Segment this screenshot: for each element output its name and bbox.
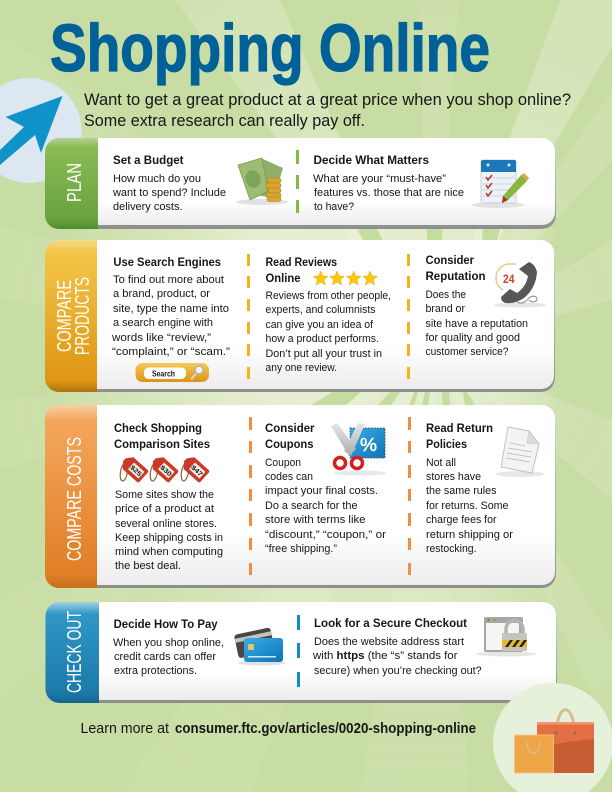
icon: search button xyxy=(136,363,209,382)
icon: phone with 24 clock: 24 xyxy=(503,274,515,286)
title: Shopping Online xyxy=(50,11,490,86)
text: consider reputation: Does the xyxy=(426,289,466,301)
text: consider reputation: Reputation xyxy=(426,269,486,283)
icon: shopping bags in circle xyxy=(493,683,612,792)
text: check shopping comparison sites: Keep shipping costs in xyxy=(115,532,223,544)
plan tab xyxy=(45,138,98,229)
text: consider coupons: Consider xyxy=(265,421,315,435)
text: read reviews online: Online xyxy=(266,271,301,285)
compare costs tab xyxy=(45,405,97,588)
check out tab xyxy=(46,602,99,703)
icon: credit cards xyxy=(234,627,286,666)
text: decide what matters xyxy=(313,153,464,213)
text: decide how to pay: When you shop online, xyxy=(113,637,224,649)
text: consider reputation: Consider xyxy=(426,253,474,267)
text: look for a secure checkout: secure) when you’re checking out? xyxy=(314,665,482,677)
icon: browser and padlock xyxy=(476,617,536,656)
learn more link text: consumer.ftc.gov/articles/0020-shopping-online xyxy=(175,721,476,737)
plan label: PLAN xyxy=(64,163,86,202)
text: use search engines: words like “review,” xyxy=(111,332,211,344)
text: use search engines: “complaint,” or “scam.” xyxy=(112,346,230,358)
text: check shopping comparison sites: Check Shopping xyxy=(114,421,202,435)
text: read return policies: charge fees for xyxy=(426,514,497,526)
icon: money and coins xyxy=(236,158,288,205)
divider xyxy=(297,615,300,687)
text: use search engines: a search engine with xyxy=(113,317,213,329)
text: consider reputation xyxy=(426,253,528,358)
text: set a budget: How much do you xyxy=(113,173,201,185)
text: consider coupons: impact your final costs. xyxy=(265,485,378,497)
text: look for a secure checkout: Does the website address start xyxy=(314,636,465,648)
text: read return policies: Policies xyxy=(426,437,467,451)
divider xyxy=(249,417,252,575)
text: check shopping comparison sites xyxy=(114,421,223,572)
text: check shopping comparison sites: the best deal. xyxy=(115,560,181,572)
text: consider coupons: “discount,” “coupon,” or xyxy=(265,529,386,541)
text: check shopping comparison sites: mind when computing xyxy=(115,546,223,558)
panel: plan xyxy=(45,138,556,229)
text: read reviews online: Don’t put all your trust in xyxy=(266,348,382,360)
text: check shopping comparison sites: several online stores. xyxy=(115,518,217,530)
text: set a budget xyxy=(112,153,226,213)
text: read return policies: Read Return xyxy=(426,421,493,435)
text: consider coupons: store with terms like xyxy=(265,514,366,526)
text: read reviews online: experts, and columnists xyxy=(266,304,376,316)
text: read return policies xyxy=(426,421,513,555)
intro text xyxy=(84,90,571,130)
text: use search engines: a brand, product, or xyxy=(113,288,210,300)
text: check shopping comparison sites: Some sites show the xyxy=(115,489,214,501)
text: consider reputation: brand or xyxy=(426,303,465,315)
text: consider coupons: codes can xyxy=(265,471,313,483)
icon: scissors and coupon: % xyxy=(360,435,377,455)
panel: compare costs xyxy=(45,405,556,588)
compare products label xyxy=(54,277,94,355)
text: read return policies: restocking. xyxy=(426,543,476,555)
text: use search engines: site, type the name into xyxy=(113,303,229,315)
text: read return policies: for returns. Some xyxy=(426,500,508,512)
text: read return policies: Not all xyxy=(426,457,456,469)
text: decide how to pay xyxy=(113,617,224,677)
icon: price tags: $30 xyxy=(158,464,173,478)
text: consider coupons: Do a search for the xyxy=(265,500,358,512)
text: decide how to pay: extra protections. xyxy=(114,665,197,677)
check out label: CHECK OUT xyxy=(64,611,86,693)
text: look for a secure checkout: Look for a Secure Checkout xyxy=(314,616,467,630)
text: read reviews online: Reviews from other people, xyxy=(266,290,391,302)
text: read reviews online xyxy=(266,255,391,374)
text: set a budget: Set a Budget xyxy=(113,153,184,167)
text: check shopping comparison sites: Comparison Sites xyxy=(114,437,210,451)
panel: check out xyxy=(46,602,557,703)
text: decide what matters: features vs. those that are nice xyxy=(314,187,464,199)
text: read return policies: return shipping or xyxy=(426,529,513,541)
divider xyxy=(407,254,410,379)
learn more link text: Learn more at xyxy=(80,721,169,737)
text: consider coupons xyxy=(265,421,386,555)
text: decide what matters: What are your “must-have” xyxy=(313,173,446,185)
icon: price tags xyxy=(119,454,210,483)
text: consider reputation: customer service? xyxy=(426,346,508,358)
text: read reviews online: Read Reviews xyxy=(266,255,337,269)
icon: document xyxy=(496,427,544,477)
text: consider coupons: Coupons xyxy=(265,437,314,451)
text: read return policies: stores have xyxy=(426,471,481,483)
text: consider reputation: site have a reputation xyxy=(426,318,528,330)
divider xyxy=(296,150,299,213)
text: decide how to pay: Decide How To Pay xyxy=(114,617,218,631)
compare products label: COMPARE xyxy=(54,280,76,352)
panel: compare products xyxy=(45,240,555,392)
compare costs label: COMPARE COSTS xyxy=(64,437,86,561)
compare products label: PRODUCTS xyxy=(72,277,94,355)
text: read reviews online: how a product performs. xyxy=(266,333,379,345)
icon: four stars xyxy=(313,271,377,285)
icon: search button: Search xyxy=(152,368,175,378)
text: use search engines: To find out more about xyxy=(113,274,225,286)
text: look for a secure checkout xyxy=(312,616,482,677)
text: use search engines: Use Search Engines xyxy=(113,255,221,269)
intro text: Some extra research can really pay off. xyxy=(84,111,365,130)
divider xyxy=(408,417,411,575)
icon: scissors and coupon xyxy=(331,423,386,476)
intro text: Want to get a great product at a great price when you shop online? xyxy=(84,90,571,109)
compare products tab xyxy=(45,240,97,392)
icon: price tags: $47 xyxy=(189,464,204,478)
text: use search engines xyxy=(111,255,230,358)
text: check shopping comparison sites: price of a product at xyxy=(115,503,215,515)
text: read reviews online: any one review. xyxy=(266,362,337,374)
text: consider reputation: for quality and good xyxy=(426,332,520,344)
text: decide what matters: to have? xyxy=(314,201,354,213)
text: read return policies: the same rules xyxy=(426,485,497,497)
text: consider coupons: “free shipping.” xyxy=(265,543,337,555)
text: decide how to pay: credit cards can offer xyxy=(114,651,216,663)
text: set a budget: want to spend? Include xyxy=(112,187,226,199)
divider xyxy=(247,254,250,379)
icon: checklist and pencil xyxy=(472,160,529,208)
icon: arrow in circle xyxy=(0,78,82,183)
text: consider coupons: Coupon xyxy=(265,457,301,469)
icon: phone with 24 clock xyxy=(494,262,546,308)
text: decide what matters: Decide What Matters xyxy=(314,153,429,167)
text: set a budget: delivery costs. xyxy=(113,201,182,213)
text: read reviews online: can give you an idea of xyxy=(266,319,374,331)
icon: price tags: $25 xyxy=(128,464,143,478)
text: look for a secure checkout: with https (the “s” stands for xyxy=(312,650,458,662)
